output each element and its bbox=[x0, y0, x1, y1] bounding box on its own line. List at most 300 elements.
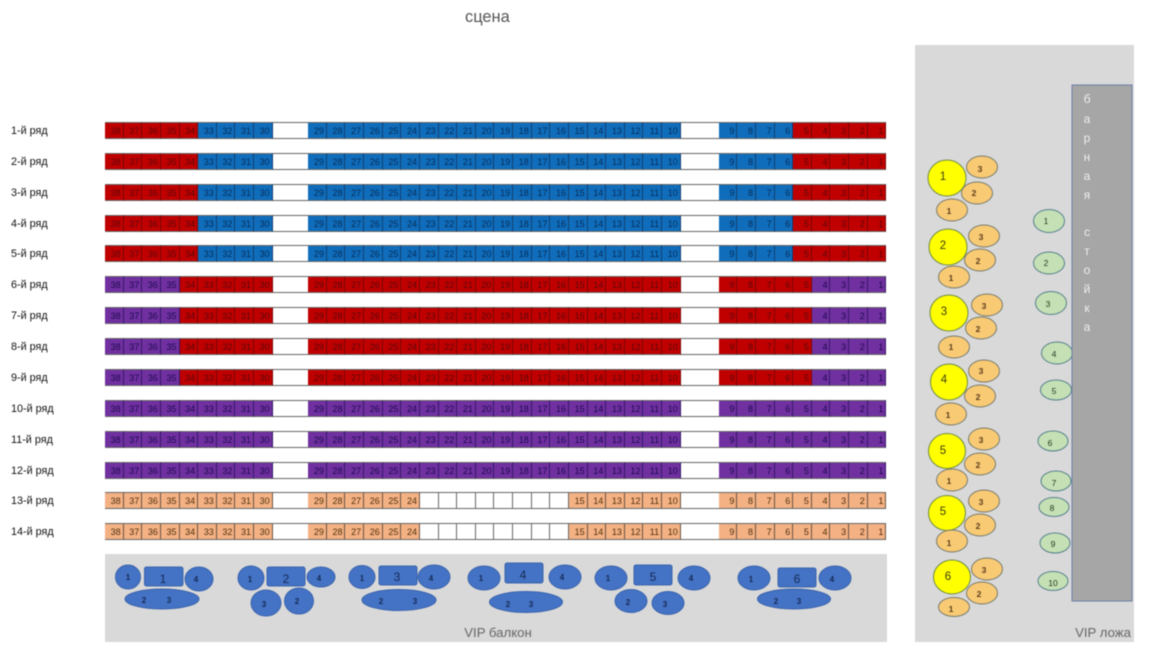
row 9: 33 bbox=[204, 373, 214, 383]
row 10: 11 bbox=[650, 404, 659, 414]
row 5: 38 bbox=[111, 249, 121, 259]
row 3: 27 bbox=[351, 188, 361, 198]
row 1: 38 bbox=[111, 126, 121, 136]
lounge table group 2: 2 bbox=[976, 256, 981, 266]
row 3: 28 bbox=[332, 188, 342, 198]
row 12: 12 bbox=[630, 466, 640, 476]
row 10: 6 bbox=[785, 404, 790, 414]
row 1: 12 bbox=[630, 126, 640, 136]
row 2 bbox=[10, 152, 887, 171]
row 1: 14 bbox=[593, 126, 603, 136]
row 9: 34 bbox=[185, 373, 195, 383]
row 12: 26 bbox=[370, 466, 380, 476]
row 9: 13 bbox=[612, 373, 622, 383]
row 6: 33 bbox=[204, 280, 214, 290]
lounge green tables: 7 bbox=[1052, 478, 1057, 488]
lounge table group 6: 3 bbox=[982, 565, 987, 575]
balcony table 5 bbox=[595, 565, 710, 614]
row 12: 9 bbox=[729, 466, 734, 476]
row 6: 2 bbox=[860, 280, 865, 290]
row 4: 25 bbox=[388, 219, 398, 229]
row 1: 5 bbox=[804, 126, 809, 136]
row 6: 30 bbox=[260, 280, 270, 290]
row 7: 8 bbox=[748, 311, 753, 321]
row 4: 16 bbox=[556, 219, 566, 229]
lounge table group 6 bbox=[934, 558, 1002, 616]
row 7: 20 bbox=[481, 311, 491, 321]
balcony table 1: 3 bbox=[167, 596, 172, 605]
row 7: 7-й ряд bbox=[11, 310, 48, 322]
row 14: 11 bbox=[650, 527, 659, 537]
row 7 bbox=[10, 306, 887, 325]
balcony table 6: 2 bbox=[774, 597, 779, 606]
balcony table 2 bbox=[238, 566, 335, 616]
row 4: 26 bbox=[370, 219, 380, 229]
row 12: 30 bbox=[260, 466, 270, 476]
lounge table group 3: 1 bbox=[949, 342, 954, 352]
row 14: 34 bbox=[185, 527, 195, 537]
row 2: 35 bbox=[166, 157, 176, 167]
row 11: 26 bbox=[370, 435, 380, 445]
row 8: 8-й ряд bbox=[11, 341, 48, 353]
row 4: 8 bbox=[748, 219, 753, 229]
row 10: 4 bbox=[822, 404, 827, 414]
lounge table group 5: 5 bbox=[940, 445, 946, 457]
row 8: 28 bbox=[332, 342, 342, 352]
row 11: 8 bbox=[748, 435, 753, 445]
row 1: 37 bbox=[129, 126, 139, 136]
row 8: 27 bbox=[351, 342, 361, 352]
row 11: 7 bbox=[767, 435, 772, 445]
row 3: 11 bbox=[650, 188, 659, 198]
row 5: 3 bbox=[841, 249, 846, 259]
balcony table 4: 3 bbox=[529, 600, 534, 609]
row 8: 3 bbox=[841, 342, 846, 352]
row 14: 4 bbox=[822, 527, 827, 537]
row 5: 18 bbox=[519, 249, 529, 259]
row 5: 12 bbox=[630, 249, 640, 259]
row 6: 36 bbox=[148, 280, 158, 290]
row 8: 9 bbox=[729, 342, 734, 352]
row 9: 22 bbox=[444, 373, 454, 383]
lounge green tables: 8 bbox=[1050, 503, 1055, 513]
row 1: 6 bbox=[785, 126, 790, 136]
row 6: 23 bbox=[426, 280, 436, 290]
row 9: 23 bbox=[426, 373, 436, 383]
row 7: 36 bbox=[148, 311, 158, 321]
row 14: 27 bbox=[351, 527, 361, 537]
row 5: 2 bbox=[860, 249, 865, 259]
row 14: 30 bbox=[260, 527, 270, 537]
row 5: 5-й ряд bbox=[11, 248, 48, 260]
row 14: 6 bbox=[785, 527, 790, 537]
row 1: 11 bbox=[650, 126, 659, 136]
row 8: 36 bbox=[148, 342, 158, 352]
row 5: 10 bbox=[668, 249, 678, 259]
row 13: 6 bbox=[785, 496, 790, 506]
row 5: 7 bbox=[767, 249, 772, 259]
row 9: 35 bbox=[166, 373, 176, 383]
row 6: 6 bbox=[785, 280, 790, 290]
row 6: 32 bbox=[222, 280, 232, 290]
row 11: 32 bbox=[222, 435, 232, 445]
row 4: 4-й ряд bbox=[11, 218, 48, 230]
row 2: 20 bbox=[481, 157, 491, 167]
row 13: 12 bbox=[630, 496, 640, 506]
row 9: 24 bbox=[407, 373, 417, 383]
row 8: 1 bbox=[878, 342, 883, 352]
row 7: 38 bbox=[111, 311, 121, 321]
row 3: 3-й ряд bbox=[11, 187, 48, 199]
row 6: 10 bbox=[668, 280, 678, 290]
balcony table 2: 4 bbox=[317, 574, 322, 583]
row 13: 37 bbox=[129, 496, 139, 506]
row 5: 33 bbox=[204, 249, 214, 259]
row 3: 37 bbox=[129, 188, 139, 198]
row 8: 16 bbox=[556, 342, 566, 352]
row 7: 34 bbox=[185, 311, 195, 321]
row 5: 19 bbox=[500, 249, 510, 259]
row 5: 11 bbox=[650, 249, 659, 259]
row 11: 29 bbox=[314, 435, 324, 445]
row 13: 36 bbox=[148, 496, 158, 506]
row 6: 12 bbox=[630, 280, 640, 290]
row 11: 15 bbox=[575, 435, 585, 445]
row 10: 12 bbox=[630, 404, 640, 414]
row 5: 4 bbox=[822, 249, 827, 259]
row 4: 10 bbox=[668, 219, 678, 229]
row 13: 5 bbox=[804, 496, 809, 506]
row 3: 5 bbox=[804, 188, 809, 198]
row 4: 7 bbox=[767, 219, 772, 229]
row 2: 8 bbox=[748, 157, 753, 167]
lounge green tables: 4 bbox=[1052, 349, 1057, 359]
row 7: 15 bbox=[575, 311, 585, 321]
row 9: 38 bbox=[111, 373, 121, 383]
row 3: 38 bbox=[111, 188, 121, 198]
row 8: 34 bbox=[185, 342, 195, 352]
row 8: 33 bbox=[204, 342, 214, 352]
row 4: 4 bbox=[822, 219, 827, 229]
row 8: 22 bbox=[444, 342, 454, 352]
row 2: 3 bbox=[841, 157, 846, 167]
row 2: 13 bbox=[612, 157, 622, 167]
row 1: 10 bbox=[668, 126, 678, 136]
row 14: 14-й ряд bbox=[11, 526, 54, 538]
row 13: 32 bbox=[222, 496, 232, 506]
row 7: 32 bbox=[222, 311, 232, 321]
row 2: 26 bbox=[370, 157, 380, 167]
row 10: 3 bbox=[841, 404, 846, 414]
bar counter: с bbox=[1084, 225, 1090, 239]
row 4: 23 bbox=[426, 219, 436, 229]
lounge table group 5: 1 bbox=[947, 476, 952, 486]
row 5: 34 bbox=[185, 249, 195, 259]
row 12: 7 bbox=[767, 466, 772, 476]
row 2: 31 bbox=[241, 157, 251, 167]
row 4: 30 bbox=[260, 219, 270, 229]
row 2: 23 bbox=[426, 157, 436, 167]
row 5: 8 bbox=[748, 249, 753, 259]
row 10: 37 bbox=[129, 404, 139, 414]
row 1: 17 bbox=[537, 126, 547, 136]
row 11: 16 bbox=[556, 435, 566, 445]
row 2: 24 bbox=[407, 157, 417, 167]
balcony table 6: 1 bbox=[749, 575, 754, 584]
row 1: 15 bbox=[575, 126, 585, 136]
row 12: 32 bbox=[222, 466, 232, 476]
row 1: 4 bbox=[822, 126, 827, 136]
row 7: 14 bbox=[593, 311, 603, 321]
row 4: 28 bbox=[332, 219, 342, 229]
row 8: 7 bbox=[767, 342, 772, 352]
row 13: 29 bbox=[314, 496, 324, 506]
row 3: 29 bbox=[314, 188, 324, 198]
row 5: 6 bbox=[785, 249, 790, 259]
row 3: 24 bbox=[407, 188, 417, 198]
row 7: 35 bbox=[166, 311, 176, 321]
row 13: 24 bbox=[407, 496, 417, 506]
row 13: 8 bbox=[748, 496, 753, 506]
row 3: 16 bbox=[556, 188, 566, 198]
row 3: 22 bbox=[444, 188, 454, 198]
row 11: 3 bbox=[841, 435, 846, 445]
row 12: 21 bbox=[463, 466, 473, 476]
row 11: 34 bbox=[185, 435, 195, 445]
row 8: 18 bbox=[519, 342, 529, 352]
row 11: 27 bbox=[351, 435, 361, 445]
row 9: 2 bbox=[860, 373, 865, 383]
row 10: 21 bbox=[463, 404, 473, 414]
row 7: 24 bbox=[407, 311, 417, 321]
row 5: 21 bbox=[463, 249, 473, 259]
row 14: 28 bbox=[332, 527, 342, 537]
row 14: 13 bbox=[612, 527, 622, 537]
bar counter bbox=[1072, 85, 1132, 601]
balcony table 1: 4 bbox=[194, 575, 199, 584]
row 7: 7 bbox=[767, 311, 772, 321]
row 6: 28 bbox=[332, 280, 342, 290]
row 12: 17 bbox=[537, 466, 547, 476]
row 1: 32 bbox=[222, 126, 232, 136]
row 9: 36 bbox=[148, 373, 158, 383]
balcony table 1: 1 bbox=[126, 573, 131, 582]
bar counter: б bbox=[1084, 92, 1091, 106]
balcony table 3: 4 bbox=[429, 574, 434, 583]
row 4: 20 bbox=[481, 219, 491, 229]
row 11: 4 bbox=[822, 435, 827, 445]
row 7: 25 bbox=[388, 311, 398, 321]
row 1: 30 bbox=[260, 126, 270, 136]
row 7: 33 bbox=[204, 311, 214, 321]
row 5: 37 bbox=[129, 249, 139, 259]
row 4: 22 bbox=[444, 219, 454, 229]
row 7: 12 bbox=[630, 311, 640, 321]
row 5: 20 bbox=[481, 249, 491, 259]
row 14: 3 bbox=[841, 527, 846, 537]
row 7: 6 bbox=[785, 311, 790, 321]
row 12: 28 bbox=[332, 466, 342, 476]
row 10: 23 bbox=[426, 404, 436, 414]
row 3: 9 bbox=[729, 188, 734, 198]
row 10: 2 bbox=[860, 404, 865, 414]
row 13: 38 bbox=[111, 496, 121, 506]
row 13: 4 bbox=[822, 496, 827, 506]
lounge table group 1: 2 bbox=[972, 188, 977, 198]
lounge green tables: 1 bbox=[1044, 216, 1049, 226]
row 2: 36 bbox=[148, 157, 158, 167]
row 3: 35 bbox=[166, 188, 176, 198]
row 7: 4 bbox=[822, 311, 827, 321]
row 14: 14 bbox=[593, 527, 603, 537]
lounge table group 5 second: 3 bbox=[979, 497, 984, 507]
row 3: 21 bbox=[463, 188, 473, 198]
row 10 bbox=[11, 399, 887, 418]
row 6: 15 bbox=[575, 280, 585, 290]
row 2: 10 bbox=[668, 157, 678, 167]
row 14: 26 bbox=[370, 527, 380, 537]
row 11: 20 bbox=[481, 435, 491, 445]
row 2: 17 bbox=[537, 157, 547, 167]
row 6: 17 bbox=[537, 280, 547, 290]
row 14: 32 bbox=[222, 527, 232, 537]
row 13: 14 bbox=[593, 496, 603, 506]
balcony table 3: 2 bbox=[379, 597, 384, 606]
row 12: 13 bbox=[612, 466, 622, 476]
row 6: 13 bbox=[612, 280, 622, 290]
row 3: 33 bbox=[204, 188, 214, 198]
row 3: 20 bbox=[481, 188, 491, 198]
row 5: 5 bbox=[804, 249, 809, 259]
balcony table 5: 5 bbox=[650, 570, 657, 584]
row 4: 31 bbox=[241, 219, 251, 229]
row 1: 26 bbox=[370, 126, 380, 136]
row 12: 16 bbox=[556, 466, 566, 476]
row 14: 24 bbox=[407, 527, 417, 537]
row 9: 30 bbox=[260, 373, 270, 383]
balcony table 3: 1 bbox=[360, 574, 365, 583]
row 11: 10 bbox=[668, 435, 678, 445]
row 14: 29 bbox=[314, 527, 324, 537]
row 12: 19 bbox=[500, 466, 510, 476]
row 6: 5 bbox=[804, 280, 809, 290]
row 1: 1 bbox=[878, 126, 883, 136]
row 12: 24 bbox=[407, 466, 417, 476]
row 3: 8 bbox=[748, 188, 753, 198]
row 6: 16 bbox=[556, 280, 566, 290]
row 11: 12 bbox=[630, 435, 640, 445]
row 13: 15 bbox=[575, 496, 585, 506]
lounge table group 4: 4 bbox=[941, 374, 948, 386]
row 10: 19 bbox=[500, 404, 510, 414]
heading: stage: сцена bbox=[465, 8, 510, 26]
row 11: 18 bbox=[519, 435, 529, 445]
row 8: 17 bbox=[537, 342, 547, 352]
row 6: 7 bbox=[767, 280, 772, 290]
row 14: 37 bbox=[129, 527, 139, 537]
row 10: 10 bbox=[668, 404, 678, 414]
row 10: 26 bbox=[370, 404, 380, 414]
row 13: 10 bbox=[668, 496, 678, 506]
row 9: 18 bbox=[519, 373, 529, 383]
row 11: 1 bbox=[878, 435, 883, 445]
row 9: 32 bbox=[222, 373, 232, 383]
bar counter: й bbox=[1084, 282, 1090, 296]
row 1: 21 bbox=[463, 126, 473, 136]
row 5: 22 bbox=[444, 249, 454, 259]
balcony table 5: 3 bbox=[663, 600, 668, 609]
row 5: 24 bbox=[407, 249, 417, 259]
row 4: 13 bbox=[612, 219, 622, 229]
row 7: 16 bbox=[556, 311, 566, 321]
row 4: 21 bbox=[463, 219, 473, 229]
row 7: 37 bbox=[129, 311, 139, 321]
row 10: 22 bbox=[444, 404, 454, 414]
row 7: 18 bbox=[519, 311, 529, 321]
row 6: 18 bbox=[519, 280, 529, 290]
balcony table 3: 3 bbox=[394, 570, 401, 584]
lounge table group 5 second: 5 bbox=[940, 506, 946, 518]
lounge table group 3 bbox=[930, 294, 1002, 358]
row 10: 17 bbox=[537, 404, 547, 414]
row 11: 37 bbox=[129, 435, 139, 445]
row 9: 7 bbox=[767, 373, 772, 383]
row 2: 18 bbox=[519, 157, 529, 167]
lounge table group 4 bbox=[930, 360, 1000, 425]
row 4: 6 bbox=[785, 219, 790, 229]
row 8 bbox=[10, 337, 887, 356]
row 6: 38 bbox=[111, 280, 121, 290]
row 12: 38 bbox=[111, 466, 121, 476]
row 11: 17 bbox=[537, 435, 547, 445]
row 6: 24 bbox=[407, 280, 417, 290]
row 5: 16 bbox=[556, 249, 566, 259]
row 5: 28 bbox=[332, 249, 342, 259]
row 6: 22 bbox=[444, 280, 454, 290]
row 1: 9 bbox=[729, 126, 734, 136]
row 13: 1 bbox=[878, 496, 883, 506]
bar counter: т bbox=[1084, 244, 1090, 258]
row 5: 35 bbox=[166, 249, 176, 259]
row 2: 14 bbox=[593, 157, 603, 167]
row 8: 24 bbox=[407, 342, 417, 352]
row 6: 11 bbox=[650, 280, 659, 290]
row 3: 2 bbox=[860, 188, 865, 198]
row 8: 8 bbox=[748, 342, 753, 352]
row 7: 27 bbox=[351, 311, 361, 321]
row 5: 25 bbox=[388, 249, 398, 259]
row 3: 32 bbox=[222, 188, 232, 198]
row 8: 26 bbox=[370, 342, 380, 352]
row 8: 20 bbox=[481, 342, 491, 352]
row 4: 14 bbox=[593, 219, 603, 229]
balcony table 2: 2 bbox=[295, 597, 300, 606]
row 3 bbox=[10, 183, 887, 202]
row 2: 28 bbox=[332, 157, 342, 167]
lounge table group 4: 3 bbox=[979, 366, 984, 376]
row 3: 25 bbox=[388, 188, 398, 198]
row 9: 3 bbox=[841, 373, 846, 383]
balcony table 2: 2 bbox=[283, 572, 290, 586]
row 7: 31 bbox=[241, 311, 251, 321]
row 7: 13 bbox=[612, 311, 622, 321]
row 9: 27 bbox=[351, 373, 361, 383]
balcony table 4: 2 bbox=[506, 600, 511, 609]
row 11: 35 bbox=[166, 435, 176, 445]
row 3: 12 bbox=[630, 188, 640, 198]
row 6: 1 bbox=[878, 280, 883, 290]
row 1: 2 bbox=[860, 126, 865, 136]
